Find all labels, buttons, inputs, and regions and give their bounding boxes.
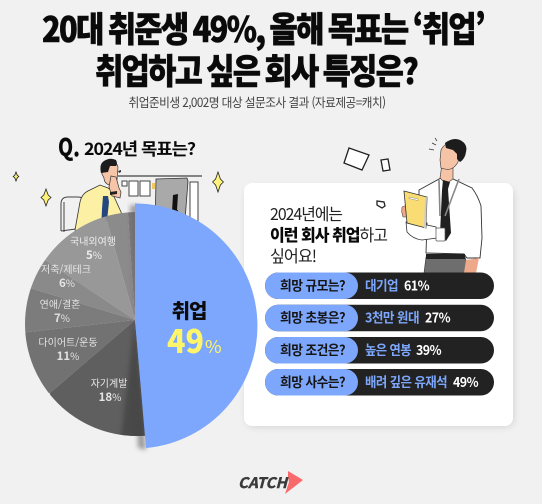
pie slice: 국내외여행 <box>45 216 135 320</box>
row: 희망 규모는: 61% <box>404 274 430 294</box>
pie label: 연애/결혼 7%: 7% <box>54 310 70 326</box>
panel heading <box>270 201 388 267</box>
row: 희망 초봉은: 27% <box>425 307 451 327</box>
logo: CATCH: CATCH <box>238 472 289 493</box>
lanyard and badge <box>439 179 459 216</box>
row: 희망 사수는: 49% <box>453 371 479 391</box>
pie slice: 다이어트/운동 <box>25 320 135 394</box>
pie label: 국내외여행 5%: 국내외여행 <box>70 233 116 248</box>
row: 희망 초봉은: 희망 초봉은? <box>280 307 346 327</box>
illustration: man on phone <box>75 159 124 236</box>
panel heading: 이런 회사 취업하고 <box>270 222 388 246</box>
belt <box>426 254 465 259</box>
pie label: 취업: 취업 <box>172 295 206 324</box>
pie label: 자기계발 18%: 자기계발 <box>91 375 127 390</box>
pie value: 49%: % <box>205 333 222 359</box>
row: 희망 조건은: 39% <box>416 339 442 359</box>
pie label: 연애/결혼 7% <box>40 296 80 326</box>
pie slice: 자기계발 <box>50 320 146 445</box>
arm <box>406 221 437 240</box>
row: 희망 사수는: 희망 사수는? <box>280 371 346 391</box>
row: 희망 사수는 <box>265 369 494 396</box>
row: 희망 조건은: 희망 조건은? <box>280 339 346 359</box>
folder <box>404 191 427 228</box>
icon: monitor <box>155 178 188 233</box>
subtitle: 취업준비생 2,002명 대상 설문조사 결과 (자료제공=캐치) <box>128 92 386 111</box>
motion lines <box>429 138 437 150</box>
pie label: 연애/결혼 7%: 연애/결혼 <box>40 296 80 311</box>
hand <box>402 205 407 217</box>
row: 희망 규모는: 희망 규모는? <box>280 274 346 294</box>
pie chart <box>20 200 257 450</box>
row: 희망 조건은: 높은 연봉 <box>365 339 411 359</box>
row: 희망 규모는: 대기업 <box>365 274 398 294</box>
pie slice: 연애/결혼 <box>25 288 134 332</box>
row: 희망 조건은 <box>265 337 494 364</box>
title: 취업하고 싶은 회사 특징은? <box>95 44 418 95</box>
question heading: 2024년 목표는? <box>84 135 195 160</box>
panel: desired company <box>244 183 513 426</box>
title: 20대 취준생 49%, 올해 목표는 ‘취업’ <box>42 2 485 53</box>
pie label: 국내외여행 5%: 5% <box>86 247 102 263</box>
pie label: 다이어트/운동 11% <box>38 334 98 364</box>
pie label: 국내외여행 5% <box>70 233 116 263</box>
illustration: office background <box>61 176 202 232</box>
row: 희망 사수는: 배려 깊은 유재석 <box>365 371 447 391</box>
panel heading: 싶어요! <box>270 243 316 267</box>
neck and head <box>440 164 453 184</box>
pie value: 49%: 49 <box>167 317 204 363</box>
tie <box>440 180 451 241</box>
pie label: 저축/제테크 6% <box>41 261 91 291</box>
illustration: man with folder <box>402 138 482 273</box>
pie slice: 저축/제테크 <box>30 260 134 320</box>
icon: sparkles <box>13 172 223 206</box>
pie label: 다이어트/운동 11%: 11% <box>57 348 79 364</box>
pie label: 저축/제테크 6%: 저축/제테크 <box>41 261 91 276</box>
shirt <box>419 178 482 258</box>
row: 희망 초봉은: 3천만 원대 <box>365 307 419 327</box>
question heading <box>58 128 195 163</box>
logo: CATCH <box>238 471 303 494</box>
pie slice: 취업 <box>135 204 257 448</box>
pie slices: gray <box>25 212 145 436</box>
panel heading: 2024년에는 <box>270 201 343 225</box>
title <box>42 2 485 95</box>
row: 희망 초봉은 <box>265 305 494 331</box>
wedge shadow <box>133 320 146 450</box>
panel shadow <box>246 187 514 427</box>
question heading: Q. <box>58 128 80 163</box>
pie label: 다이어트/운동 11%: 다이어트/운동 <box>38 334 98 349</box>
icon: flying papers <box>344 148 390 208</box>
pie label: 저축/제테크 6%: 6% <box>59 275 75 291</box>
pie label: 자기계발 18%: 18% <box>99 389 121 405</box>
trousers <box>424 257 470 273</box>
row: 희망 규모는 <box>265 272 494 299</box>
pie label: 자기계발 18% <box>91 375 127 405</box>
